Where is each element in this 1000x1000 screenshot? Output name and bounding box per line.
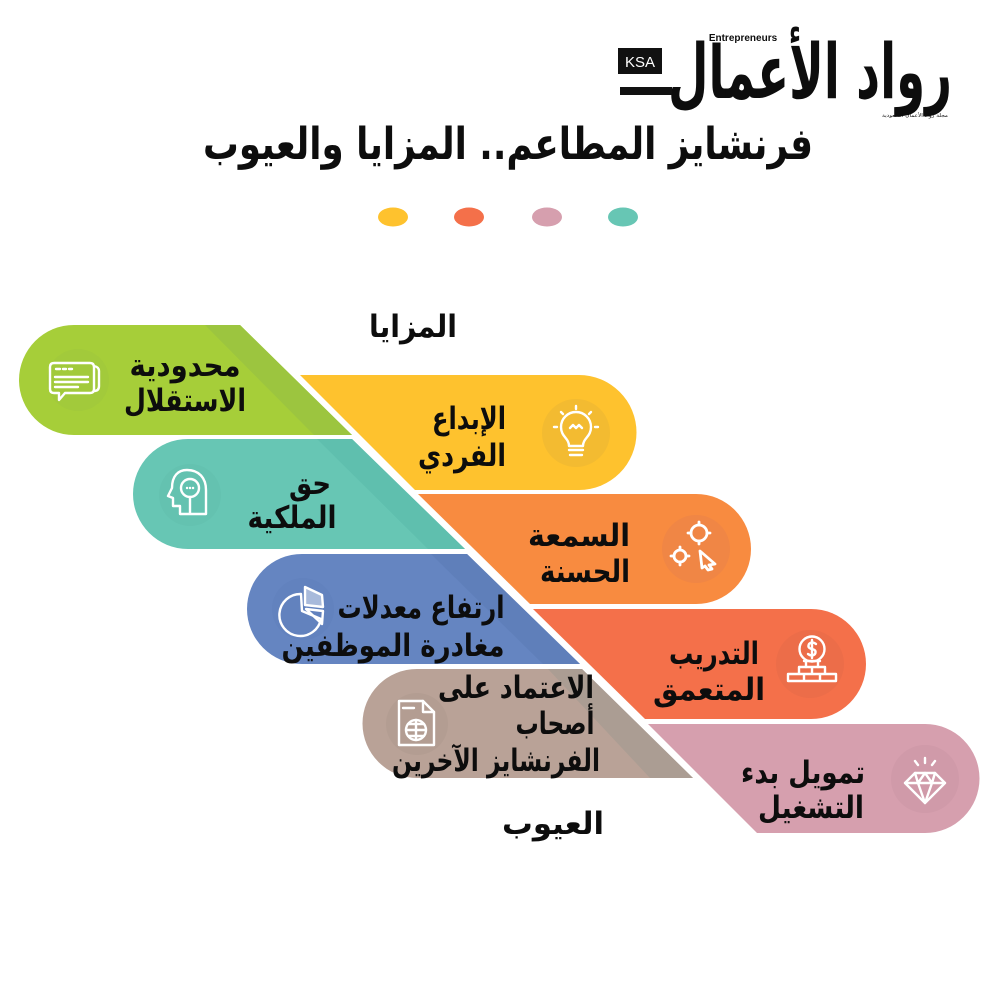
text: in-depth training: التدريب — [669, 636, 759, 672]
text: individual creativity: الإبداع — [432, 401, 506, 437]
text: high employee turnover — [282, 590, 504, 664]
icon: light bulb — [554, 406, 598, 455]
icon: pie chart — [279, 587, 323, 636]
title: فرنشايز المطاعم.. المزايا والعيوب — [203, 119, 813, 170]
panel: limited independence — [19, 325, 352, 435]
text: ownership rights: الملكية — [248, 500, 336, 536]
text: limited independence: الاستقلال — [124, 383, 246, 419]
text: reliance on other franchisees: أصحاب — [516, 703, 594, 742]
text: limited independence — [124, 348, 246, 419]
icon: web document — [399, 701, 434, 745]
text: startup funding — [741, 755, 865, 826]
text: good reputation: الحسنة — [540, 554, 630, 590]
logo tagline: مجلة رواد الأعمال السعودية — [882, 112, 948, 119]
text: reliance on other franchisees: الاعتماد على — [438, 670, 594, 706]
text: good reputation: السمعة — [528, 518, 630, 554]
logo KSA badge — [618, 48, 662, 74]
text: individual creativity — [418, 401, 506, 474]
legend dots — [378, 208, 638, 226]
logo — [618, 26, 952, 119]
panel: reliance on other franchisees — [362, 669, 693, 779]
text: startup funding: تمويل بدء — [741, 755, 865, 791]
panel: in-depth training — [533, 609, 866, 719]
text: ownership rights — [248, 466, 336, 536]
text: in-depth training — [653, 636, 765, 708]
logo tail stroke — [620, 87, 672, 95]
heading: advantages: المزايا — [369, 309, 457, 345]
text: ownership rights: حق — [289, 466, 331, 502]
heading: disadvantages: العيوب — [502, 806, 604, 842]
logo KSA badge: KSA — [625, 54, 655, 71]
text: individual creativity: الفردي — [418, 438, 506, 474]
icon: targets and cursor — [671, 522, 715, 570]
logo Entrepreneurs label: Entrepreneurs — [709, 33, 778, 44]
panel: startup funding — [648, 724, 980, 833]
text: high employee turnover: مغادرة الموظفين — [282, 628, 504, 664]
text: limited independence: محدودية — [130, 348, 240, 384]
icon: coin on bricks — [788, 636, 836, 681]
panel: individual creativity — [300, 375, 636, 490]
panel: high employee turnover — [247, 554, 580, 664]
text: reliance on other franchisees: الفرنشايز الآخرين — [392, 742, 600, 779]
panel: good reputation — [418, 494, 751, 604]
text: reliance on other franchisees — [392, 670, 600, 779]
text: in-depth training: المتعمق — [653, 672, 765, 708]
icon: chat bubbles — [50, 363, 99, 400]
text: good reputation — [528, 518, 630, 590]
text: startup funding: التشغيل — [758, 790, 864, 826]
text: high employee turnover: ارتفاع معدلات — [338, 590, 504, 626]
icon: diamond — [905, 758, 945, 803]
icon: head — [168, 470, 206, 514]
panel: ownership rights — [133, 439, 465, 549]
